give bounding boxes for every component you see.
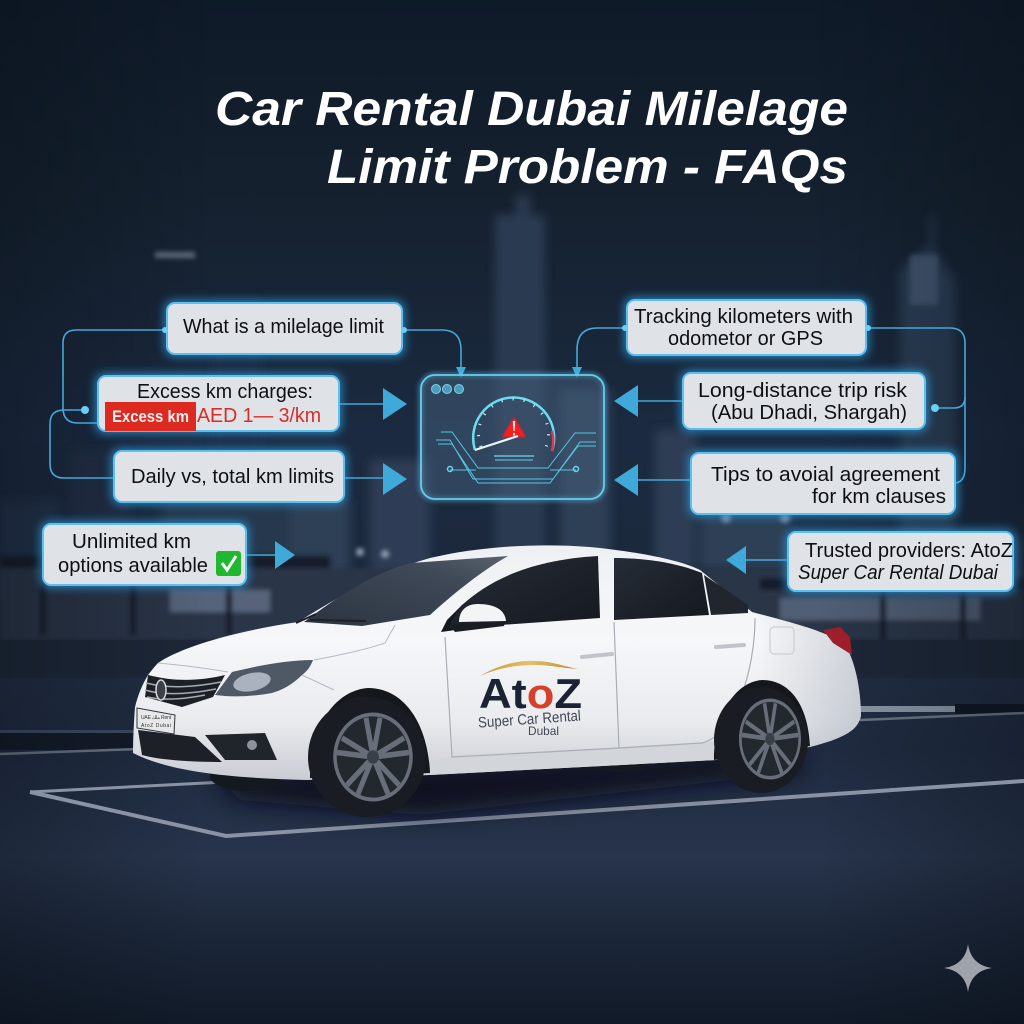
number plate: AtoZ Dubai [141,723,171,729]
dashboard gauge panel [421,375,604,499]
fog lamp [205,733,277,760]
front wheel [308,697,426,817]
card: Daily vs total km limits [114,451,344,502]
card: Excess km charges [98,376,339,431]
card: Tracking kilometers [627,300,866,355]
card: Excess km charges: Excess km charges: [137,381,313,403]
needle [475,436,518,450]
car body [133,545,861,780]
door logo [477,661,582,738]
door seams and handles [445,618,755,757]
door logo: Dubal [528,724,559,738]
title: Limit Problem - FAQs [327,141,848,194]
hood crease lines [158,625,395,690]
rear door window [614,558,709,620]
ground: parking lot [0,640,1024,1024]
card: Long-distance trip risk: Long-distance trip risk [698,380,908,402]
title [215,83,848,194]
side mirror [450,604,506,632]
fuel flap [770,627,794,654]
card: Tips [691,453,955,514]
car shadow [210,750,800,815]
quarter window [704,575,748,615]
card: Trusted providers [788,532,1013,591]
connector nodes [81,325,939,414]
card: Long-distance trip risk [683,373,925,429]
distant lamp [155,252,195,258]
title: Car Rental Dubai Milelage [215,83,848,136]
number plate [137,708,175,734]
card: Unlimited km options: Unlimited km [72,531,191,553]
card: Trusted providers: Super Car Rental Dubai [798,562,999,584]
warning triangle [502,417,526,437]
tail lamp [823,627,852,655]
wheel arches [310,680,810,778]
icon: green check [216,551,241,576]
card: What is a milelage limit: What is a milelage limit [183,316,384,338]
front door window [449,556,600,628]
window dots [432,384,464,394]
A-pillar trim [441,605,470,632]
glow behind cards [41,298,1015,593]
speedometer arc [473,397,554,451]
headlight [215,660,313,696]
number plate: UAE ملك Rent [141,715,172,721]
icon: sparkle watermark [944,944,992,992]
logo swoosh [480,661,579,676]
rear wheel [714,687,808,793]
door logo: AtoZ [479,670,582,717]
arrowheads [275,367,746,574]
lower grille [138,730,222,762]
wipers [296,614,366,623]
card: Tracking kilometers: odometor or GPS [668,328,823,350]
card: Trusted providers: Trusted providers: AtoZ [805,540,1013,562]
car [133,545,861,817]
card: What is a milelage limit [167,303,402,354]
card: Tips: for km clauses [812,486,946,508]
card: Long-distance trip risk: (Abu Dhadi, Shargah) [711,402,907,424]
background: blurred Dubai skyline [0,195,1024,640]
door logo: Super Car Rental [477,707,581,732]
rear shading [600,612,861,768]
card: Unlimited km options [43,524,246,585]
card: Excess km charges: Excess km [112,407,189,426]
card: Unlimited km options: options available [58,555,208,577]
parking bay lines [30,781,1024,836]
far side tyres [210,761,282,791]
red excess km label [105,402,196,431]
card: Daily vs total km limits: Daily vs, total km limits [131,466,334,488]
card: Tracking kilometers: Tracking kilometers with [634,306,853,328]
grille [145,675,225,707]
lower sill shade [430,741,716,775]
circuit lines [436,432,596,483]
windshield [304,556,508,626]
card: Tips: Tips to avoial agreement [711,464,940,486]
card: Excess km charges: AED 1— 3/km [197,405,321,427]
connector lines [50,328,965,560]
